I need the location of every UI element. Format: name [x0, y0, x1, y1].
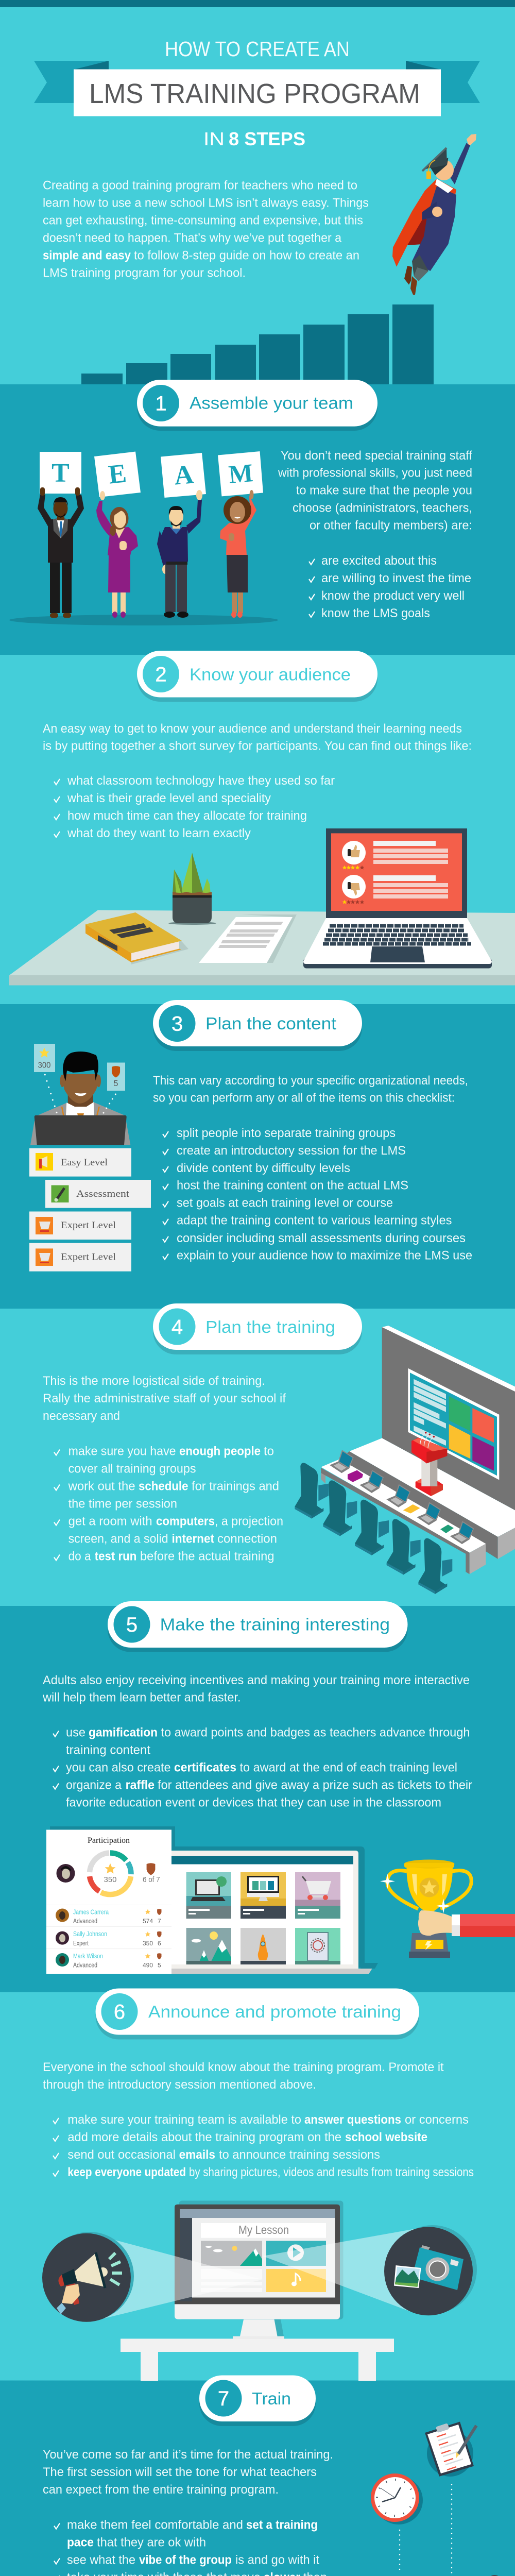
lesson text rows	[201, 2269, 262, 2292]
leaderboard row: James Carrera: 574	[143, 1918, 153, 1925]
heading: step 4	[153, 1303, 362, 1354]
checklist: training tips: set a training	[246, 2518, 318, 2532]
projection screen	[408, 1368, 499, 1480]
badge: points: 300	[38, 1061, 51, 1070]
checklist: incentives: to award at the end of each training level	[240, 1761, 457, 1775]
leaderboard row: James Carrera	[56, 1908, 162, 1925]
text: plan the training: This is the more logistical side of training.	[43, 1374, 265, 1388]
leaderboard row: Mark Wilson: 5	[158, 1962, 161, 1969]
card: T: T	[52, 459, 70, 488]
card: A	[161, 453, 206, 498]
text: make the training interesting: Adults also enjoy receiving incentives and making your training more interactive	[43, 1673, 470, 1687]
checklist: training tips: that they are ok with	[97, 2536, 206, 2550]
table	[321, 1459, 486, 1574]
checklist: logistics: to	[264, 1445, 274, 1459]
checklist: survey questions: what is their grade level and speciality	[67, 791, 271, 805]
illustration: hand holding trophy	[380, 1860, 515, 1958]
checklist: team qualities: know the LMS goals	[321, 606, 430, 620]
intro paragraph: to follow 8-step guide on how to create an	[134, 248, 359, 263]
text: assemble your team: You don’t need special training staff	[281, 449, 472, 463]
card: M	[218, 451, 263, 496]
intro paragraph: LMS training program for your school.	[43, 266, 246, 280]
laptops and books on table	[330, 1450, 474, 1544]
title block	[34, 37, 480, 149]
intro paragraph: simple and easy	[43, 248, 131, 263]
level card: easy	[29, 1148, 131, 1177]
checklist: logistics: cover all training groups	[68, 1462, 196, 1476]
checklist: content items: set goals at each training level or course	[177, 1196, 393, 1210]
checklist: promotion	[53, 2113, 474, 2179]
text: train: You’ve come so far and it’s time for the actual training.	[43, 2448, 333, 2462]
leaderboard row: James Carrera: Advanced	[73, 1917, 97, 1925]
text: train	[43, 2448, 333, 2497]
tile: code	[186, 1872, 231, 1919]
text: plan the content: so you can perform any or all of the items on this checklist:	[153, 1091, 455, 1105]
heading: step 6	[96, 1989, 419, 2039]
checklist: logistics	[54, 1445, 283, 1564]
checklist: logistics: make sure you have	[68, 1445, 176, 1459]
heading: step 3: 3	[171, 1013, 183, 1036]
checklist: content items: adapt the training content to various learning styles	[177, 1214, 452, 1228]
person: man in suit	[38, 487, 84, 618]
badge: points	[34, 1044, 55, 1072]
text: know your audience	[43, 722, 472, 753]
level card: easy: Easy Level	[61, 1157, 108, 1168]
checklist: training tips: see what the	[67, 2553, 135, 2567]
ribbon banner: LMS TRAINING PROGRAM	[89, 78, 420, 109]
checklist: content items: consider including small assessments during courses	[177, 1231, 466, 1245]
checklist: content items: explain to your audience how to maximize the LMS use	[177, 1249, 472, 1262]
checklist: team qualities: know the product very well	[321, 589, 465, 603]
text: make the training interesting: will help them learn better and faster.	[42, 1691, 241, 1705]
tile: monitor	[241, 1872, 286, 1919]
lesson audio tile	[266, 2269, 326, 2292]
participation card	[46, 1830, 171, 1974]
checklist: training tips: pace	[67, 2536, 94, 2550]
checklist: incentives: you can also create	[66, 1761, 171, 1775]
text: plan the training: Rally the administrative staff of your school if	[43, 1392, 286, 1405]
wall and stage	[340, 1326, 515, 1559]
dotted connector lines	[400, 2484, 452, 2573]
checklist: logistics: enough people	[179, 1445, 261, 1459]
person: woman in coral	[220, 490, 256, 618]
beam left	[102, 2236, 262, 2319]
checklist: incentives: to award points and badges as teachers advance through	[161, 1726, 470, 1740]
text: plan the training	[43, 1374, 286, 1423]
checklist: logistics: get a room with	[68, 1515, 152, 1529]
participation card: 350	[104, 1875, 117, 1884]
checklist: incentives: favorite education event or devices that they can use in the classroom	[66, 1796, 441, 1809]
checklist: training tips: is and go with it	[235, 2553, 319, 2567]
checklist: logistics: connection	[217, 1532, 277, 1546]
checklist: promotion: add more details about the training program on the	[67, 2130, 341, 2144]
leaderboard row: Sally Johnson: 350	[143, 1940, 153, 1947]
card: M: M	[228, 458, 254, 489]
text: plan the training: necessary and	[43, 1409, 120, 1423]
level card: expert: Expert Level	[61, 1220, 116, 1231]
laptop base and keyboard	[303, 918, 492, 969]
text: announce and promote: through the introductory session mentioned above.	[43, 2078, 316, 2092]
checklist: incentives: organize a	[66, 1778, 122, 1792]
participation card: Participation	[88, 1836, 130, 1845]
icon: flying graduate	[392, 134, 476, 295]
checklist: training tips: make them feel comfortable and	[67, 2518, 243, 2532]
checklist: logistics: work out the	[68, 1480, 135, 1494]
heading: step 4: Plan the training	[205, 1317, 335, 1336]
heading: step 6: Announce and promote training	[148, 2002, 401, 2021]
text: assemble your team: or other faculty members) are:	[310, 518, 472, 533]
icon: megaphone	[42, 2232, 134, 2322]
checklist: team qualities	[309, 554, 471, 620]
checklist: logistics: before the actual training	[140, 1550, 274, 1564]
lesson title: My Lesson	[238, 2223, 289, 2236]
illustration: gamified course laptop	[46, 1826, 378, 1974]
person at laptop	[30, 1052, 130, 1145]
chairs	[295, 1463, 452, 1594]
trophy base	[409, 1933, 450, 1958]
checklist: logistics: do a	[68, 1550, 91, 1564]
text: announce and promote	[43, 2060, 444, 2092]
checklist: team qualities: are excited about this	[321, 554, 437, 568]
dotted trails	[44, 1074, 116, 1114]
tile: rocket	[241, 1928, 286, 1964]
ribbon banner	[34, 61, 480, 116]
checklist: content items: host the training content on the actual LMS	[177, 1179, 408, 1193]
projector screen	[358, 2575, 501, 2576]
heading: step 3: Plan the content	[205, 1014, 336, 1033]
heading: step 5: Make the training interesting	[160, 1615, 390, 1634]
book	[85, 912, 188, 964]
checklist: promotion: make sure your training team is available to	[67, 2113, 301, 2127]
intro paragraph: doesn’t need to happen. That’s why we’ve put together a	[43, 231, 342, 245]
checklist: survey questions: how much time can they allocate for training	[67, 809, 307, 823]
heading: step 1: 1	[155, 393, 167, 415]
illustration: presenter and audience	[249, 2421, 501, 2576]
card: T	[40, 452, 81, 494]
badge: shield	[107, 1062, 125, 1091]
checklist: content items: divide content by difficulty levels	[177, 1161, 350, 1175]
card: E: E	[107, 459, 128, 490]
heading: step 2: Know your audience	[190, 665, 351, 684]
laptop	[171, 1846, 378, 1974]
icon: clipboard checklist	[425, 2421, 476, 2477]
text: assemble your team: choose (administrators, teachers,	[293, 501, 472, 515]
heading: step 2: 2	[155, 664, 167, 686]
text: assemble your team: with professional skills, you just need	[278, 466, 472, 480]
text: announce and promote: Everyone in the school should know about the training program. Promote it	[43, 2060, 444, 2074]
icon: wall clock	[371, 2473, 423, 2524]
intro paragraph: can get exhausting, time-consuming and expensive, but this	[43, 213, 363, 228]
heading: step 5	[108, 1601, 408, 1652]
checklist: logistics: schedule	[139, 1480, 188, 1494]
level card: assessment	[45, 1180, 151, 1208]
checklist: logistics: test run	[95, 1550, 136, 1564]
lesson title	[201, 2223, 326, 2238]
checklist: incentives: use	[66, 1726, 85, 1740]
checklist: incentives: training content	[66, 1743, 150, 1757]
hand and sleeve	[418, 1910, 515, 1937]
checklist: training tips: vibe of the group	[139, 2553, 232, 2567]
checklist: content items	[163, 1126, 472, 1262]
intro paragraph	[43, 178, 369, 280]
heading: step 1: Assemble your team	[190, 394, 353, 412]
illustration: learner with badges and levels	[29, 1044, 151, 1272]
badge: shield: 5	[114, 1079, 118, 1088]
heading: step 4: 4	[171, 1316, 183, 1338]
card: A: A	[173, 460, 195, 491]
checklist: content items: create an introductory session for the LMS	[177, 1144, 406, 1158]
heading: step 5: 5	[126, 1614, 138, 1636]
paper	[199, 914, 297, 963]
checklist: training tips	[54, 2518, 327, 2576]
checklist: logistics: computers	[156, 1515, 215, 1529]
checklist: promotion: keep everyone updated	[67, 2165, 186, 2179]
checklist: promotion: school website	[345, 2130, 427, 2144]
level card: expert repeated	[29, 1243, 131, 1272]
title line: how to create an: HOW TO CREATE AN	[165, 37, 350, 61]
leaderboard row: Mark Wilson: Advanced	[73, 1961, 97, 1969]
checklist: logistics: internet	[172, 1532, 214, 1546]
beam right	[263, 2229, 414, 2312]
person: man in navy sweater	[157, 490, 202, 618]
checklist: survey questions	[54, 774, 335, 840]
donut chart	[90, 1853, 131, 1894]
checklist: incentives	[53, 1726, 472, 1809]
checklist: incentives: raffle	[126, 1778, 154, 1792]
leaderboard row: Sally Johnson	[56, 1930, 162, 1947]
tile: cart	[295, 1872, 340, 1919]
leaderboard row: Mark Wilson	[56, 1952, 162, 1969]
participation card: 6 of 7	[143, 1875, 160, 1884]
plant	[168, 853, 216, 925]
checklist: logistics: for trainings and	[192, 1480, 279, 1494]
bar chart: rising steps	[81, 304, 434, 384]
heading: step 7: Train	[252, 2389, 291, 2408]
text: plan the content: This can vary according to your specific organizational needs,	[153, 1074, 468, 1088]
checklist: promotion: by sharing pictures, videos and results from training sessions	[189, 2165, 474, 2179]
card: E	[94, 451, 141, 497]
lesson image tile	[201, 2241, 262, 2266]
person: woman in purple	[96, 491, 138, 618]
tile: mountains	[186, 1928, 231, 1964]
heading: step 1	[137, 380, 377, 431]
tile: gear diagram	[295, 1928, 340, 1964]
desk	[9, 910, 515, 985]
text: make the training interesting	[42, 1673, 470, 1705]
lectern	[411, 1432, 447, 1496]
illustration: desk with laptop, plant, book and paper	[9, 828, 515, 985]
leaderboard row: James Carrera: 7	[158, 1918, 161, 1925]
main avatar	[57, 1864, 75, 1883]
text: assemble your team	[278, 449, 472, 533]
negative review	[342, 875, 448, 904]
checklist: promotion: emails	[179, 2148, 215, 2162]
leaderboard row: Mark Wilson: 490	[143, 1962, 153, 1969]
checklist: survey questions: what do they want to learn exactly	[67, 826, 251, 840]
heading: step 6: 6	[114, 2001, 125, 2024]
desk	[121, 2338, 394, 2381]
checklist: survey questions: what classroom technology have they used so far	[67, 774, 335, 788]
heading: step 2	[137, 651, 377, 702]
leaderboard row: James Carrera: James Carrera	[73, 1908, 109, 1916]
leaderboard row: Mark Wilson: Mark Wilson	[73, 1952, 103, 1960]
checklist: promotion: or concerns	[405, 2113, 469, 2127]
text: train: can expect from the entire training program.	[43, 2483, 279, 2497]
lesson video tile	[266, 2241, 326, 2266]
subtitle: in 8 steps: 8 STEPS	[229, 128, 305, 149]
text: plan the content	[153, 1074, 468, 1105]
checklist: incentives: certificates	[174, 1761, 236, 1775]
checklist: promotion: to announce training sessions	[219, 2148, 380, 2162]
checklist: promotion: answer questions	[304, 2113, 401, 2127]
checklist: incentives: for attendees and give away a prize such as tickets to their	[158, 1778, 472, 1792]
leaderboard row: Sally Johnson: Expert	[73, 1939, 89, 1947]
checklist: logistics: screen, and a solid	[68, 1532, 168, 1546]
text: know your audience: An easy way to get to know your audience and understand their learning needs	[43, 722, 462, 736]
intro paragraph: Creating a good training program for teachers who need to	[43, 178, 357, 193]
level card: assessment: Assessment	[76, 1189, 130, 1199]
illustration: team holding letters	[9, 451, 278, 625]
subtitle: in 8 steps: IN	[203, 128, 225, 149]
checklist: team qualities: are willing to invest the time	[321, 571, 471, 585]
level card: expert	[29, 1212, 131, 1240]
checklist: incentives: gamification	[89, 1726, 158, 1740]
level card: expert repeated: Expert Level	[61, 1252, 116, 1263]
heading: step 7	[199, 2375, 316, 2426]
checklist: logistics: the time per session	[68, 1497, 177, 1511]
checklist: content items: split people into separate training groups	[177, 1126, 396, 1140]
illustration: lesson monitor with media	[42, 2201, 477, 2381]
illustration: isometric training room	[295, 1326, 515, 1594]
icon: camera and photo	[384, 2225, 477, 2315]
checklist: promotion: send out occasional	[67, 2148, 176, 2162]
leaderboard row: Sally Johnson: Sally Johnson	[73, 1930, 107, 1938]
leaderboard row: Sally Johnson: 6	[158, 1940, 161, 1947]
text: assemble your team: to make sure that the people you	[296, 483, 472, 498]
heading: step 3	[153, 1000, 362, 1051]
checklist: logistics: , a projection	[215, 1515, 283, 1529]
intro paragraph: learn how to use a new school LMS isn’t always easy. Things	[43, 196, 369, 210]
positive review	[342, 841, 448, 870]
text: know your audience: is by putting together a short survey for participants. You can find out things like:	[43, 739, 472, 753]
heading: step 7: 7	[218, 2387, 229, 2410]
text: train: The first session will set the tone for what teachers	[43, 2465, 317, 2479]
monitor	[175, 2201, 343, 2339]
laptop with review screen	[303, 828, 492, 969]
